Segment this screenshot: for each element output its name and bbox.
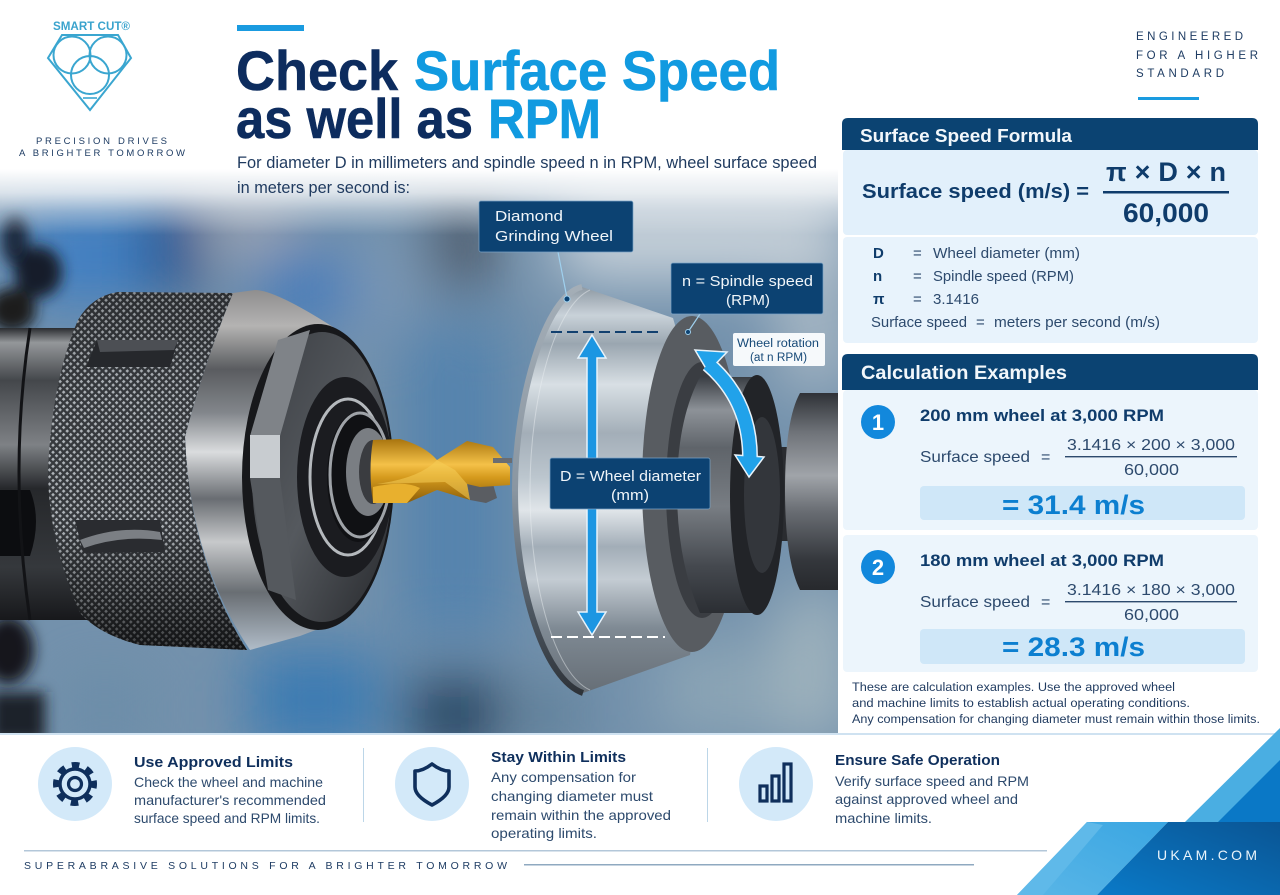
formula: Surface speed (m/s) = (862, 181, 1089, 203)
item: stay within limits: operating limits. (491, 825, 597, 841)
item: use approved limits: Check the wheel and machine (134, 774, 323, 790)
variable definitions: = (976, 314, 985, 331)
variable definitions (843, 237, 1258, 343)
footnote (852, 680, 1260, 726)
variable definitions: Surface speed (871, 314, 967, 331)
dashed diameter markers (551, 332, 665, 637)
example 1 (843, 390, 1258, 530)
example 1: = 31.4 m/s (1002, 490, 1145, 520)
example 1: 60,000 (1124, 462, 1179, 479)
spindle body (0, 328, 90, 620)
item: ensure safe operation (739, 747, 1029, 826)
logo tagline: PRECISION DRIVES (36, 136, 167, 147)
lower left dark mount (0, 692, 45, 742)
right cylinder (785, 393, 838, 590)
item: stay within limits: Stay Within Limits (491, 750, 626, 766)
variable definitions: 3.1416 (933, 291, 979, 308)
example 1: 3.1416 × 200 × 3,000 (1067, 437, 1235, 454)
chuck knurled band (48, 292, 247, 650)
item: stay within limits (395, 747, 671, 841)
example 1: 1 (872, 410, 884, 435)
footnote: These are calculation examples. Use the approved wheel (852, 680, 1175, 694)
item: use approved limits: Use Approved Limits (134, 755, 293, 771)
divider (707, 748, 708, 822)
icon: bar chart (739, 747, 813, 821)
title (236, 39, 780, 150)
variable definitions: meters per second (m/s) (994, 314, 1160, 331)
item: ensure safe operation: machine limits. (835, 810, 932, 826)
callout: wheel diameter: (mm) (611, 487, 649, 504)
corner graphic (1017, 728, 1280, 895)
item: stay within limits: Any compensation for (491, 769, 636, 785)
callout: wheel rotation: (at n RPM) (750, 352, 807, 364)
title: RPM (488, 87, 601, 150)
top right slogan: STANDARD (1136, 68, 1224, 80)
variable definitions: D (873, 245, 884, 262)
formula (843, 150, 1258, 235)
formula: π × D × n (1106, 157, 1226, 187)
formula: 60,000 (1123, 198, 1209, 228)
variable definitions: Wheel diameter (mm) (933, 245, 1080, 262)
item: stay within limits: remain within the approved (491, 807, 671, 823)
arrow: wheel diameter (578, 335, 606, 635)
example 1: = (1041, 449, 1050, 466)
example 2: 60,000 (1124, 607, 1179, 624)
example 2: = (1041, 594, 1050, 611)
top right slogan (1136, 31, 1258, 100)
item: use approved limits: surface speed and RPM limits. (134, 810, 320, 826)
item: ensure safe operation: Verify surface speed and RPM (835, 773, 1029, 789)
title: as well as (236, 87, 473, 150)
footer rule and tagline: SUPERABRASIVE SOLUTIONS FOR A BRIGHTER TOMORROW (24, 860, 507, 872)
title accent bar (237, 25, 304, 31)
variable definitions: = (913, 245, 922, 262)
arrow: wheel rotation (695, 350, 764, 477)
formula heading (842, 118, 1258, 150)
callout: diamond grinding wheel: Diamond (495, 208, 563, 225)
top right slogan: FOR A HIGHER (1136, 50, 1258, 62)
top white fade (0, 0, 838, 235)
subtitle: in meters per second is: (237, 179, 410, 197)
subtitle: For diameter D in millimeters and spindle speed n in RPM, wheel surface speed (237, 154, 817, 172)
panel: calculation examples (842, 354, 1258, 672)
callout: wheel diameter (550, 458, 710, 509)
callout: diamond grinding wheel: Grinding Wheel (495, 228, 613, 245)
variable definitions: = (913, 268, 922, 285)
example 1: 200 mm wheel at 3,000 RPM (920, 407, 1164, 425)
chuck silver band (185, 290, 342, 650)
icon: shield (395, 747, 469, 821)
item: ensure safe operation: Ensure Safe Operation (835, 753, 1000, 769)
variable definitions: π (873, 291, 885, 308)
example 2: 180 mm wheel at 3,000 RPM (920, 552, 1164, 570)
example 2: 2 (872, 555, 884, 580)
leader lines (558, 252, 700, 334)
subtitle (237, 154, 817, 197)
panel: surface speed formula (842, 118, 1258, 343)
variable definitions: Spindle speed (RPM) (933, 268, 1074, 285)
example 1: Surface speed (920, 449, 1030, 466)
variable definitions: n (873, 268, 882, 285)
examples heading: Calculation Examples (861, 363, 1067, 384)
example 2 (843, 535, 1258, 672)
callout: diamond grinding wheel (479, 201, 633, 252)
callout: wheel rotation: Wheel rotation (737, 338, 819, 350)
callout: wheel rotation (733, 333, 825, 366)
title: Check (236, 39, 399, 102)
item: use approved limits (38, 747, 326, 826)
top right slogan: ENGINEERED (1136, 31, 1243, 43)
callout: wheel diameter: D = Wheel diameter (560, 468, 701, 485)
bottom strip top rule (0, 733, 1280, 735)
logo: Smart Cut (48, 19, 131, 110)
logo tagline: A BRIGHTER TOMORROW (19, 148, 185, 159)
photo: machine tool and grinding wheel (0, 0, 850, 750)
example 2: = 28.3 m/s (1002, 632, 1145, 662)
divider (363, 748, 364, 822)
gold drill bit (370, 439, 512, 503)
callout: spindle speed: n = Spindle speed (682, 273, 813, 290)
callout: spindle speed: (RPM) (726, 292, 770, 309)
examples heading (842, 354, 1258, 390)
callout: spindle speed (671, 263, 823, 314)
footnote: and machine limits to establish actual operating conditions. (852, 696, 1190, 710)
example 2: 3.1416 × 180 × 3,000 (1067, 582, 1235, 599)
diamond grinding wheel (515, 287, 789, 693)
chuck front face with bearing rings (242, 324, 394, 630)
footnote: Any compensation for changing diameter must remain within those limits. (852, 712, 1260, 726)
icon: gear (38, 747, 112, 821)
title: Surface Speed (414, 39, 780, 102)
logo tagline (19, 136, 185, 159)
item: stay within limits: changing diameter must (491, 788, 653, 804)
logo: Smart Cut: SMART CUT® (53, 19, 130, 33)
item: use approved limits: manufacturer's recommended (134, 792, 326, 808)
example 2: Surface speed (920, 594, 1030, 611)
formula heading: Surface Speed Formula (860, 125, 1073, 146)
item: ensure safe operation: against approved wheel and (835, 791, 1018, 807)
variable definitions: = (913, 291, 922, 308)
website label: UKAM.COM (1157, 847, 1257, 863)
